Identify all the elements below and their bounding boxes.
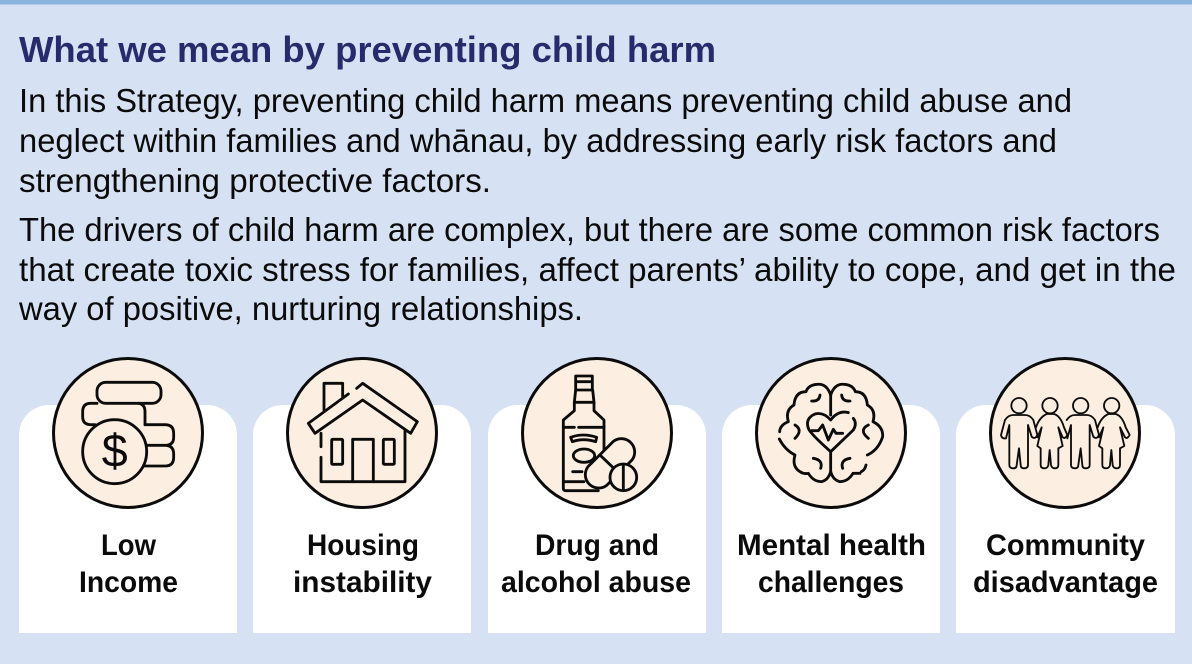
text block: drivers of harm: way of positive, nurturing relationships. <box>18 290 583 327</box>
title: What we mean by preventing child harm <box>19 29 716 70</box>
text block: definition: In this Strategy, preventing child harm means preventing child abuse and <box>19 82 1072 119</box>
panel: mental health challenges <box>722 358 940 633</box>
text block: drivers of harm <box>18 211 1176 327</box>
label <box>501 529 691 599</box>
text block: definition <box>19 82 1072 199</box>
text block: drivers of harm: The drivers of child harm are complex, but there are some common risk factors <box>19 211 1160 248</box>
icon: four people holding hands <box>1001 398 1130 468</box>
label: Low <box>101 529 157 562</box>
label <box>79 529 178 599</box>
icon: brain with heart <box>779 384 883 482</box>
label: disadvantage <box>973 566 1158 599</box>
label: challenges <box>758 566 904 599</box>
label <box>737 529 926 599</box>
icon: coins: $ <box>102 425 128 477</box>
panel: community disadvantage <box>956 358 1175 633</box>
panel: drug and alcohol abuse <box>488 358 706 633</box>
label: alcohol abuse <box>501 566 691 599</box>
label <box>293 529 432 599</box>
icon: house <box>308 383 417 482</box>
text block: drivers of harm: that create toxic stress for families, affect parents’ ability to cope, and get in the <box>19 251 1176 288</box>
panel: low income <box>19 358 237 633</box>
label: Mental health <box>737 529 926 562</box>
label: instability <box>293 566 432 599</box>
text block: definition: neglect within families and whānau, by addressing early risk factors and <box>19 122 1057 159</box>
icon: bottle and pills <box>563 376 637 491</box>
label: Income <box>79 566 178 599</box>
panel: housing instability <box>253 358 471 633</box>
icon: coins <box>83 382 174 484</box>
label: Housing <box>307 529 419 562</box>
label: Drug and <box>535 529 659 562</box>
text block: definition: strengthening protective factors. <box>19 162 491 199</box>
label: Community <box>986 529 1145 562</box>
label <box>973 529 1158 599</box>
